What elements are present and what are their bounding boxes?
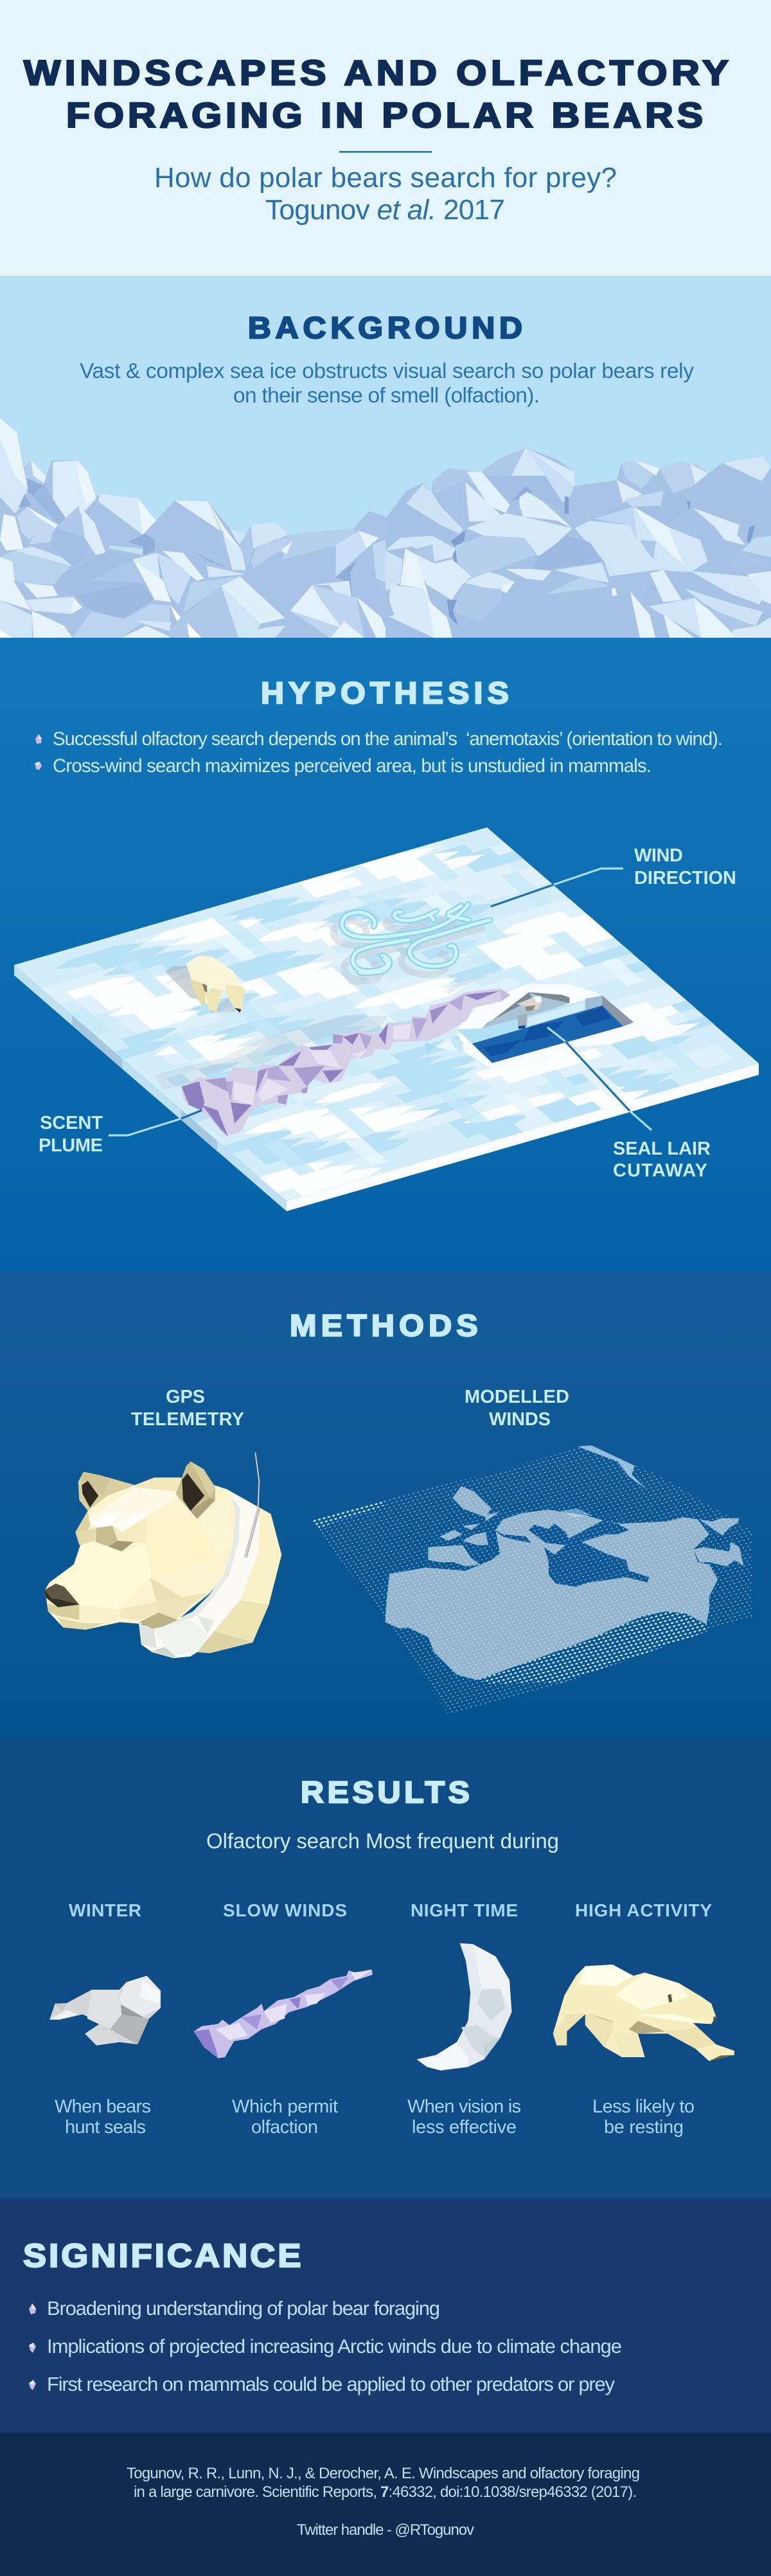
caption: Which permit	[232, 2096, 338, 2117]
panel: results	[0, 1738, 771, 2199]
significance bullets: Broadening understanding of polar bear foraging	[47, 2297, 440, 2319]
callout: seal lair cutaway: CUTAWAY	[613, 1160, 707, 1181]
label: gps telemetry: TELEMETRY	[131, 1409, 244, 1430]
callout: seal lair cutaway	[547, 1027, 711, 1181]
panel: methods	[0, 1273, 771, 1738]
panel: significance	[0, 2199, 771, 2433]
caption: hunt seals	[65, 2117, 146, 2138]
panel: footer citation	[0, 2433, 771, 2576]
hypothesis bullets	[35, 728, 723, 777]
subtitle: Togunov et al. 2017	[265, 194, 505, 226]
significance bullets	[29, 2297, 622, 2395]
icon: wind direction swirl	[333, 905, 490, 981]
caption: When vision is	[407, 2096, 521, 2117]
citation text	[127, 2465, 640, 2501]
callout: scent plume	[39, 1110, 202, 1156]
significance heading: SIGNIFICANCE	[23, 2237, 301, 2274]
illustration: sea ice left	[0, 418, 386, 638]
illustration: polar bear head with collar	[44, 1452, 281, 1658]
caption: Less likely to	[592, 2096, 695, 2117]
seal lair cutaway	[425, 984, 656, 1068]
hypothesis heading: HYPOTHESIS	[261, 676, 509, 710]
illustration: sea ice right	[386, 448, 771, 638]
column: high activity	[553, 1900, 734, 2138]
label: modelled winds: MODELLED	[465, 1387, 569, 1407]
methods heading: METHODS	[290, 1309, 478, 1343]
callout: scent plume: SCENT	[40, 1113, 103, 1133]
caption: be resting	[604, 2117, 684, 2138]
callout: wind direction	[491, 845, 736, 906]
background text: Vast & complex sea ice obstructs visual search so polar bears rely	[80, 359, 694, 383]
citation text: in a large carnivore. Scientific Reports, 7:46332, doi:10.1038/srep46332 (2017).	[134, 2483, 637, 2501]
callout: seal lair cutaway: SEAL LAIR	[613, 1139, 711, 1159]
title heading	[24, 53, 729, 135]
icon: crescent moon	[417, 1943, 511, 2071]
panel: hypothesis	[0, 638, 771, 1273]
caption	[55, 2096, 151, 2138]
icon: scent plume	[193, 1969, 373, 2058]
column: winter: WINTER	[69, 1900, 141, 1920]
caption	[592, 2096, 695, 2138]
hypothesis bullets: Cross-wind search maximizes perceived area, but is unstudied in mammals.	[53, 755, 651, 777]
title heading: WINDSCAPES AND OLFACTORY	[24, 53, 729, 93]
subtitle: How do polar bears search for prey?	[154, 162, 617, 194]
illustration: scent plume	[182, 988, 510, 1137]
caption	[232, 2096, 338, 2138]
results heading: RESULTS	[301, 1776, 470, 1810]
seal in lair	[517, 996, 542, 1011]
caption	[407, 2096, 521, 2138]
panel: title	[0, 0, 771, 276]
caption: olfaction	[251, 2117, 318, 2138]
column: night time: NIGHT TIME	[411, 1900, 518, 1920]
subtitle	[154, 162, 617, 226]
caption: When bears	[55, 2096, 151, 2117]
significance bullets: First research on mammals could be applied to other predators or prey	[47, 2373, 616, 2395]
background text: on their sense of smell (olfaction).	[233, 384, 540, 408]
callout: wind direction: DIRECTION	[634, 868, 736, 888]
illustration: modelled wind map of Canada	[312, 1445, 752, 1715]
background heading: BACKGROUND	[248, 311, 522, 345]
results subheading: Olfactory search Most frequent during	[206, 1829, 559, 1853]
diagram: sea ice platform	[14, 827, 759, 1211]
title heading: FORAGING IN POLAR BEARS	[66, 96, 703, 135]
label: gps telemetry: GPS	[166, 1387, 205, 1407]
panel: background	[0, 276, 771, 638]
column: winter	[49, 1900, 161, 2138]
callout: scent plume: PLUME	[39, 1135, 103, 1156]
column: high activity: HIGH ACTIVITY	[575, 1900, 712, 1920]
twitter handle: Twitter handle - @RTogunov	[297, 2521, 474, 2539]
hypothesis bullets: Successful olfactory search depends on the animal’s ‘anemotaxis’ (orientation to wind).	[53, 728, 723, 750]
background text	[80, 359, 694, 408]
label: modelled winds: WINDS	[489, 1409, 551, 1430]
icon: small polar bear	[165, 955, 245, 1013]
label: modelled winds	[465, 1387, 569, 1430]
column: night time	[407, 1900, 521, 2138]
icon: seal	[49, 1976, 161, 2046]
column: slow winds	[193, 1900, 373, 2138]
plume shadow	[155, 975, 490, 1089]
callout: wind direction: WIND	[634, 845, 683, 866]
citation text: Togunov, R. R., Lunn, N. J., & Derocher, A. E. Windscapes and olfactory foraging	[127, 2465, 640, 2482]
column: slow winds: SLOW WINDS	[223, 1900, 347, 1920]
significance bullets: Implications of projected increasing Arctic winds due to climate change	[47, 2335, 622, 2357]
label: gps telemetry	[131, 1387, 244, 1430]
caption: less effective	[412, 2117, 517, 2138]
ice surface tiles	[14, 827, 759, 1201]
icon: walking polar bear	[553, 1965, 734, 2061]
